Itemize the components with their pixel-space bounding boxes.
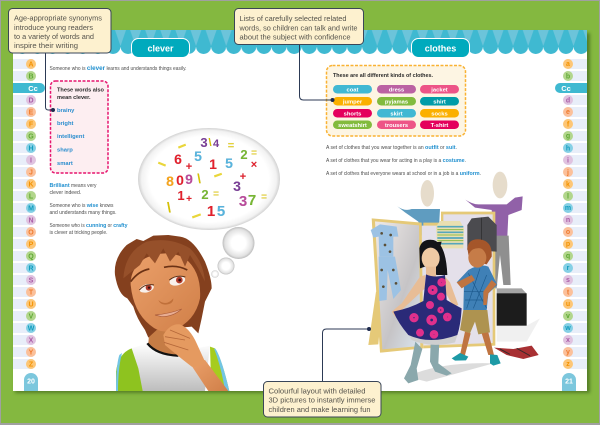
right alphabet index: Cc [561,84,571,93]
thought bubble with numbers: 0 [176,172,184,188]
left alphabet index: Q [28,254,34,260]
thought bubble with numbers: 1 [177,188,185,203]
thought bubble with numbers: × [251,159,257,171]
left alphabet index [13,59,45,369]
right alphabet index: k [566,182,570,188]
panel: synonyms of clever: bright [57,121,73,127]
right alphabet index: n [566,217,570,224]
left alphabet index: N [28,218,34,224]
left alphabet index: L [29,194,34,200]
right alphabet index: i [567,158,569,164]
right alphabet index: a [566,61,570,68]
page number 21: 21 [565,378,573,386]
panel: kinds of clothes: trousers [385,123,408,129]
thought bubble with numbers: = [261,192,267,203]
text block: word notes: Someone who is cunning or crafty [50,223,128,229]
thought bubble with numbers: 1 [209,156,217,172]
left alphabet index: K [28,182,34,188]
text block: word notes: Someone who is wise knows [50,203,114,209]
thought bubble with numbers: 2 [201,187,209,202]
definition: clever: Someone who is clever learns and understands things easily. [50,65,186,72]
callout: colourful layout: 3D pictures to instantly immerse [268,396,376,404]
right alphabet index: v [566,313,570,320]
panel: kinds of clothes: pyjamas [385,99,408,105]
right alphabet index: h [566,146,570,152]
panel: synonyms of clever [50,81,108,173]
panel: synonyms of clever: brainy [57,108,75,114]
right alphabet index [555,59,587,369]
callout: colourful layout [264,382,381,417]
left alphabet index: P [29,242,34,248]
left alphabet index: G [28,134,34,140]
thought bubble with numbers: 6 [174,151,182,167]
panel: kinds of clothes: sweatshirt [338,123,367,129]
scalloped header awning [13,30,587,55]
right alphabet index: m [565,205,571,212]
callout: synonyms: Age-appropriate synonyms [14,14,102,22]
callout: colourful layout: children and make learning fun [268,405,370,414]
right alphabet index: x [566,337,570,344]
page number 20: 20 [27,378,35,386]
left alphabet index: W [28,326,35,332]
right alphabet index: w [564,325,571,332]
callout: synonyms: introduce young readers [14,23,93,32]
left alphabet index: O [28,230,34,236]
panel: synonyms of clever: smart [57,161,73,167]
right alphabet index: l [567,194,569,200]
right alphabet index: o [566,229,570,236]
right alphabet index: b [566,74,570,80]
left alphabet index: B [28,74,34,80]
thought bubble with numbers: 8 [166,173,174,189]
right alphabet index: t [567,290,570,296]
right alphabet index: d [566,98,570,104]
right alphabet index: j [566,170,569,176]
text block: word notes: and understands many things. [50,210,116,216]
right alphabet index: r [567,265,570,272]
right alphabet index: z [566,361,570,368]
thought bubble with numbers: + [186,194,192,205]
thought bubble with numbers: + [240,171,246,183]
callout leader: layout [322,327,371,382]
thought bubble with numbers: 3 [239,193,247,210]
illustration: children with mirrors and mannequins [368,172,540,383]
left alphabet index: I [30,158,32,164]
thought bubble with numbers: \ [167,199,171,215]
callout: related words [234,8,364,44]
panel: synonyms of clever: intelligent [57,134,84,140]
text block: word notes: is clever at tricking people. [50,230,108,236]
left alphabet index: X [29,338,34,344]
panel: kinds of clothes: shirt [433,99,446,105]
panel: kinds of clothes: T-shirt [431,123,448,129]
panel: kinds of clothes: jumper [342,99,363,105]
thought bubble with numbers: 4 [213,138,220,150]
left alphabet index: D [28,98,34,104]
right alphabet index: q [566,253,570,260]
left alphabet index: Cc [28,84,38,93]
left alphabet index: H [28,146,34,152]
callout leader: related words [300,44,334,102]
panel: kinds of clothes: skirt [390,111,403,117]
left alphabet index: Y [29,350,34,356]
left alphabet index: F [29,122,34,128]
heading tab: clothes [412,38,470,58]
panel: kinds of clothes: shorts [344,111,361,117]
panel: synonyms of clever: sharp [57,148,73,154]
left alphabet index: M [28,206,34,212]
thought bubble with numbers: \ [197,171,201,186]
text block: word notes: clever indeed. [50,190,81,196]
thought bubble with numbers: 7 [248,192,256,209]
right alphabet index: e [566,109,570,116]
thought bubble with numbers: 5 [194,148,202,164]
right alphabet index: g [566,133,570,140]
heading tab: clever: clever [147,44,174,54]
panel: synonyms of clever: mean clever. [57,95,91,101]
callout: related words: words, so children can talk and write [239,24,358,32]
left alphabet index: Z [29,362,34,368]
callout: related words: about the subject with confidence [240,32,350,42]
panel: kinds of clothes: socks [431,111,448,117]
thought bubble with numbers: 1 [207,203,215,220]
text block: clothes sentences: A set of clothes that you wear together is an outfit or suit. [326,145,457,151]
panel: kinds of clothes: dress [389,87,404,93]
left alphabet index: T [29,290,34,296]
thought bubble with numbers [138,128,280,278]
thought bubble with numbers: 9 [185,171,193,187]
heading tab: clothes: clothes [425,44,456,54]
right alphabet index: p [566,241,570,248]
callout: synonyms [8,8,111,53]
left alphabet index: S [29,278,34,284]
right alphabet index: u [566,301,570,308]
heading tab: clever [132,38,190,58]
thought bubble with numbers: 5 [217,203,225,220]
thought bubble with numbers: 2 [240,147,248,162]
text block: clothes sentences: A set of clothes that you wear for acting in a play is a costume. [326,158,466,164]
text block: clothes sentences [326,145,481,177]
right alphabet index: f [567,122,570,128]
left alphabet index: E [29,110,34,116]
thought bubble with numbers: + [186,161,192,173]
callout: synonyms: inspire their writing [14,41,78,50]
left alphabet index: U [28,302,34,308]
callout: colourful layout: Colourful layout with detailed [268,386,366,396]
panel: kinds of clothes: jacket [430,87,448,93]
thought bubble with numbers: 3 [200,135,208,150]
right alphabet index: s [566,277,570,284]
panel: kinds of clothes [326,66,466,136]
thought bubble with numbers: \ [208,137,212,149]
page number 20 [24,373,38,391]
thought bubble with numbers: = [228,140,234,152]
thought bubble with numbers: = [251,148,257,159]
right alphabet index: y [566,349,570,356]
thought bubble with numbers: 3 [233,178,241,194]
page number 21 [562,373,576,391]
panel: kinds of clothes: These are all different kinds of clothes. [333,73,433,79]
text block: word notes [50,183,128,236]
left alphabet index: J [29,170,33,176]
panel: synonyms of clever: These words also [57,88,105,94]
callout leader: synonyms [46,50,55,112]
left alphabet index: V [29,314,34,320]
left alphabet index: A [28,62,34,68]
thought bubble with numbers: 5 [225,155,233,171]
left alphabet index: R [28,266,34,272]
illustration: thinking boy [115,235,229,391]
callout: related words: Lists of carefully selected related [240,14,346,23]
thought bubble with numbers: = [213,189,219,200]
text block: clothes sentences: A set of clothes that everyone wears at school or in a job is a uniform. [326,171,481,177]
text block: word notes: Brilliant means very [50,183,97,189]
panel: kinds of clothes: coat [347,87,359,93]
callout: synonyms: to a variety of words and [14,32,94,41]
